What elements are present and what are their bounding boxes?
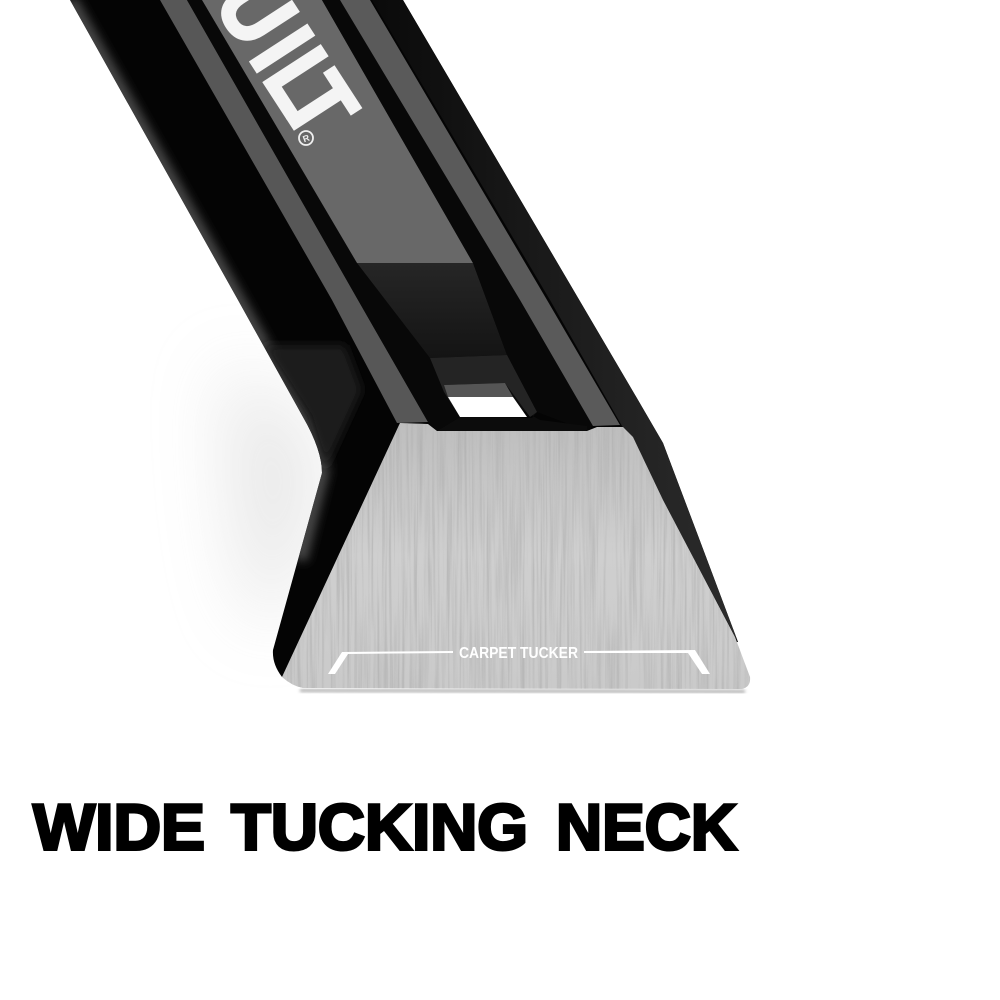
- engraved label: CARPET TUCKER: [459, 645, 578, 662]
- glossy recess: [357, 263, 507, 358]
- engraved bracket right: [584, 650, 710, 674]
- centre face: [202, 0, 473, 263]
- right groove: [322, 0, 593, 431]
- window recess: [430, 355, 537, 417]
- window inner wall: [444, 383, 513, 397]
- heading: TUCKING: [231, 790, 528, 864]
- left flank edge sheen: [70, 0, 362, 560]
- cast shadow left of neck: [225, 360, 320, 620]
- left rail: [160, 0, 428, 423]
- window opening: [448, 397, 527, 417]
- body silhouette: [70, 0, 738, 677]
- brushed texture: [282, 423, 750, 689]
- steel blade shadow: [300, 689, 745, 693]
- heading: NECK: [556, 790, 737, 864]
- right rail: [340, 0, 620, 426]
- window bezel: [430, 355, 587, 431]
- left groove: [187, 0, 460, 431]
- tool body: [70, 0, 738, 677]
- heading: WIDE: [33, 790, 205, 864]
- heading: [33, 790, 737, 864]
- registered mark: R: [301, 132, 311, 144]
- engraved bracket left: [328, 651, 453, 674]
- outer right flank: [372, 0, 738, 642]
- infographic canvas: [31, 0, 750, 852]
- registered mark: [299, 131, 313, 145]
- steel blade: [282, 423, 750, 689]
